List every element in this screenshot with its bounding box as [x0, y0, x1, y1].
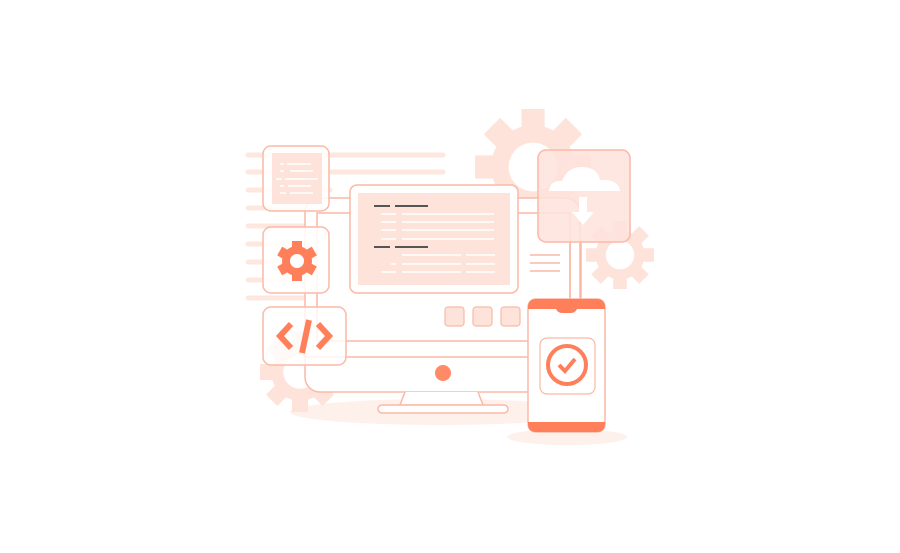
gears background [260, 109, 654, 412]
shadows [290, 399, 627, 445]
box: code [263, 307, 346, 365]
background lines [248, 155, 443, 298]
buttons [445, 307, 520, 326]
phone [528, 299, 605, 432]
connectors [570, 242, 581, 299]
screen window [350, 185, 518, 293]
box: gear [263, 227, 329, 293]
side lines [530, 255, 560, 271]
box: document [263, 146, 329, 211]
box: cloud download [538, 150, 630, 242]
monitor [305, 198, 580, 413]
check box [540, 338, 595, 394]
